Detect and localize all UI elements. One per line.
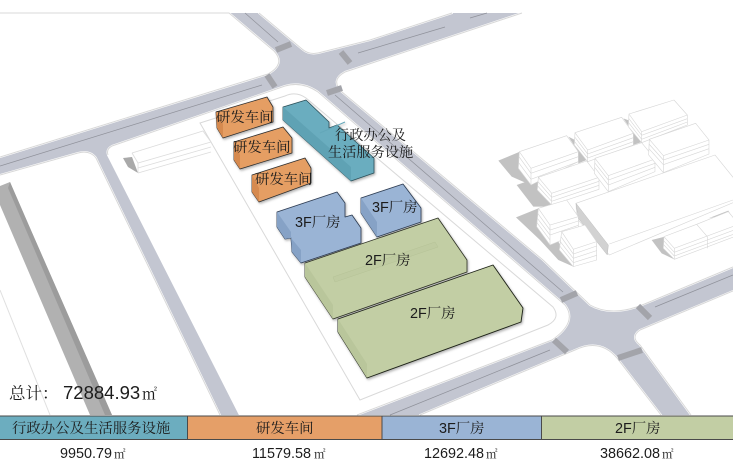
label: administration and services: 行政办公及	[335, 127, 406, 144]
value: administration: 9950.79	[60, 446, 112, 462]
label: 2F factory 1: 2F厂房	[365, 252, 411, 269]
building H	[537, 200, 578, 245]
label: administration and services: 生活服务设施	[328, 144, 413, 161]
legend label: administration: 行政办公及生活服务设施	[12, 420, 170, 437]
building: 3F factory 2	[361, 184, 421, 237]
total area: ㎡	[142, 386, 157, 403]
label: 3F factory 2: 3F厂房	[372, 199, 418, 216]
building: research workshop 1	[216, 97, 273, 138]
label: administration and services	[328, 127, 413, 161]
building shadows	[498, 118, 733, 267]
building A	[518, 136, 578, 185]
value: 2F: ㎡	[662, 448, 674, 461]
value: 3F: 12692.48	[424, 446, 484, 462]
legend: administration	[0, 416, 188, 440]
value: administration: ㎡	[114, 448, 126, 461]
long building G	[576, 155, 733, 255]
buildings J and K	[663, 212, 733, 259]
label: 2F factory 2: 2F厂房	[410, 305, 456, 322]
value: 2F: 38662.08	[600, 446, 660, 462]
building: research workshop 3	[252, 158, 311, 202]
legend label: 2F: 2F厂房	[615, 420, 661, 437]
building: administration and services	[283, 100, 374, 181]
label: research workshop 3: 研发车间	[255, 171, 313, 188]
label: research workshop 2: 研发车间	[233, 139, 291, 156]
value: 3F: ㎡	[486, 448, 498, 461]
legend bar	[0, 416, 733, 440]
value: research: 11579.58	[252, 446, 311, 462]
building C	[628, 100, 687, 143]
area values	[60, 446, 674, 462]
label: research workshop 1: 研发车间	[216, 109, 274, 126]
legend: 3F	[382, 416, 542, 440]
building: 2F factory 2	[338, 265, 523, 378]
building D	[537, 161, 599, 205]
building: 3F factory 1	[277, 192, 361, 263]
small building at site top-left	[123, 131, 211, 173]
neighbouring white buildings on the right	[498, 100, 733, 267]
building I	[559, 225, 597, 267]
total area: 72884.93	[63, 382, 140, 403]
total area	[9, 382, 157, 403]
building B	[574, 117, 633, 162]
value: research: ㎡	[314, 448, 326, 461]
legend: research	[188, 416, 382, 440]
label: 3F factory 1: 3F厂房	[295, 214, 341, 231]
map labels	[216, 109, 456, 322]
building: research workshop 2	[234, 127, 292, 169]
legend label: 3F: 3F厂房	[439, 420, 485, 437]
crosswalk stripes	[267, 44, 650, 358]
building E	[594, 143, 655, 192]
legend label: research: 研发车间	[256, 420, 314, 437]
building F	[649, 123, 709, 173]
building: 2F factory 1	[305, 218, 467, 319]
total area: 总计：	[9, 384, 58, 403]
site boundary line	[200, 94, 556, 400]
legend: 2F	[542, 416, 733, 440]
shadow strip on left	[0, 182, 112, 415]
